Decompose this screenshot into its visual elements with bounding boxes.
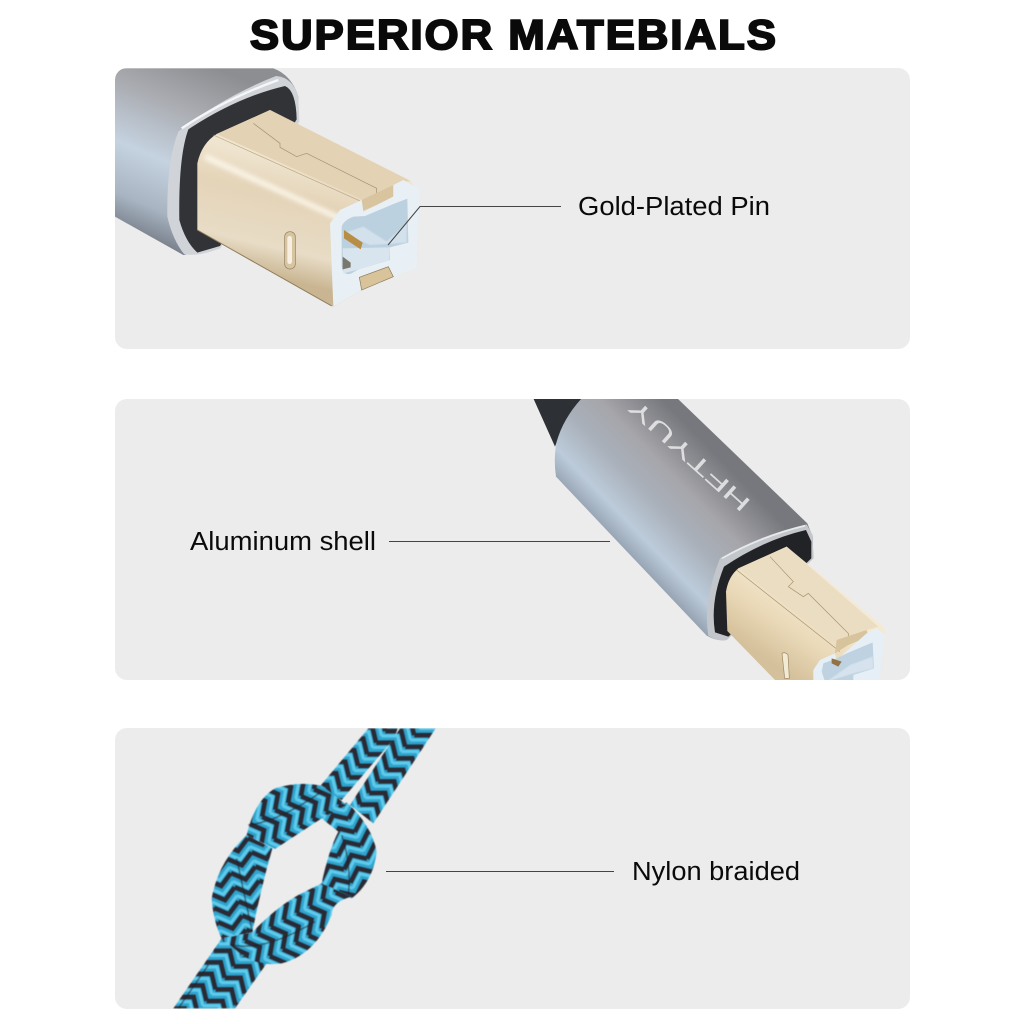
leader line	[389, 540, 610, 542]
label: gold-plated pin: Gold-Plated Pin	[578, 193, 770, 221]
title: SUPERIOR MATEBIALS	[250, 11, 778, 58]
photo: USB-B plug front view	[115, 68, 420, 307]
panel: nylon braided	[115, 728, 910, 1009]
leader line	[388, 206, 561, 245]
photo: braided cable knot	[173, 728, 436, 1008]
panel: aluminum shell	[115, 394, 910, 682]
panel background	[115, 728, 910, 1009]
panel background	[115, 399, 910, 680]
panel background	[115, 68, 910, 349]
label: nylon braided: Nylon braided	[632, 858, 800, 886]
leader line	[386, 870, 614, 872]
logo on shell: HFTYUY	[623, 394, 755, 517]
panel: gold-plated pin	[115, 68, 910, 349]
label: aluminum shell: Aluminum shell	[190, 528, 376, 556]
photo: USB-B plug with aluminum shell	[533, 394, 885, 682]
